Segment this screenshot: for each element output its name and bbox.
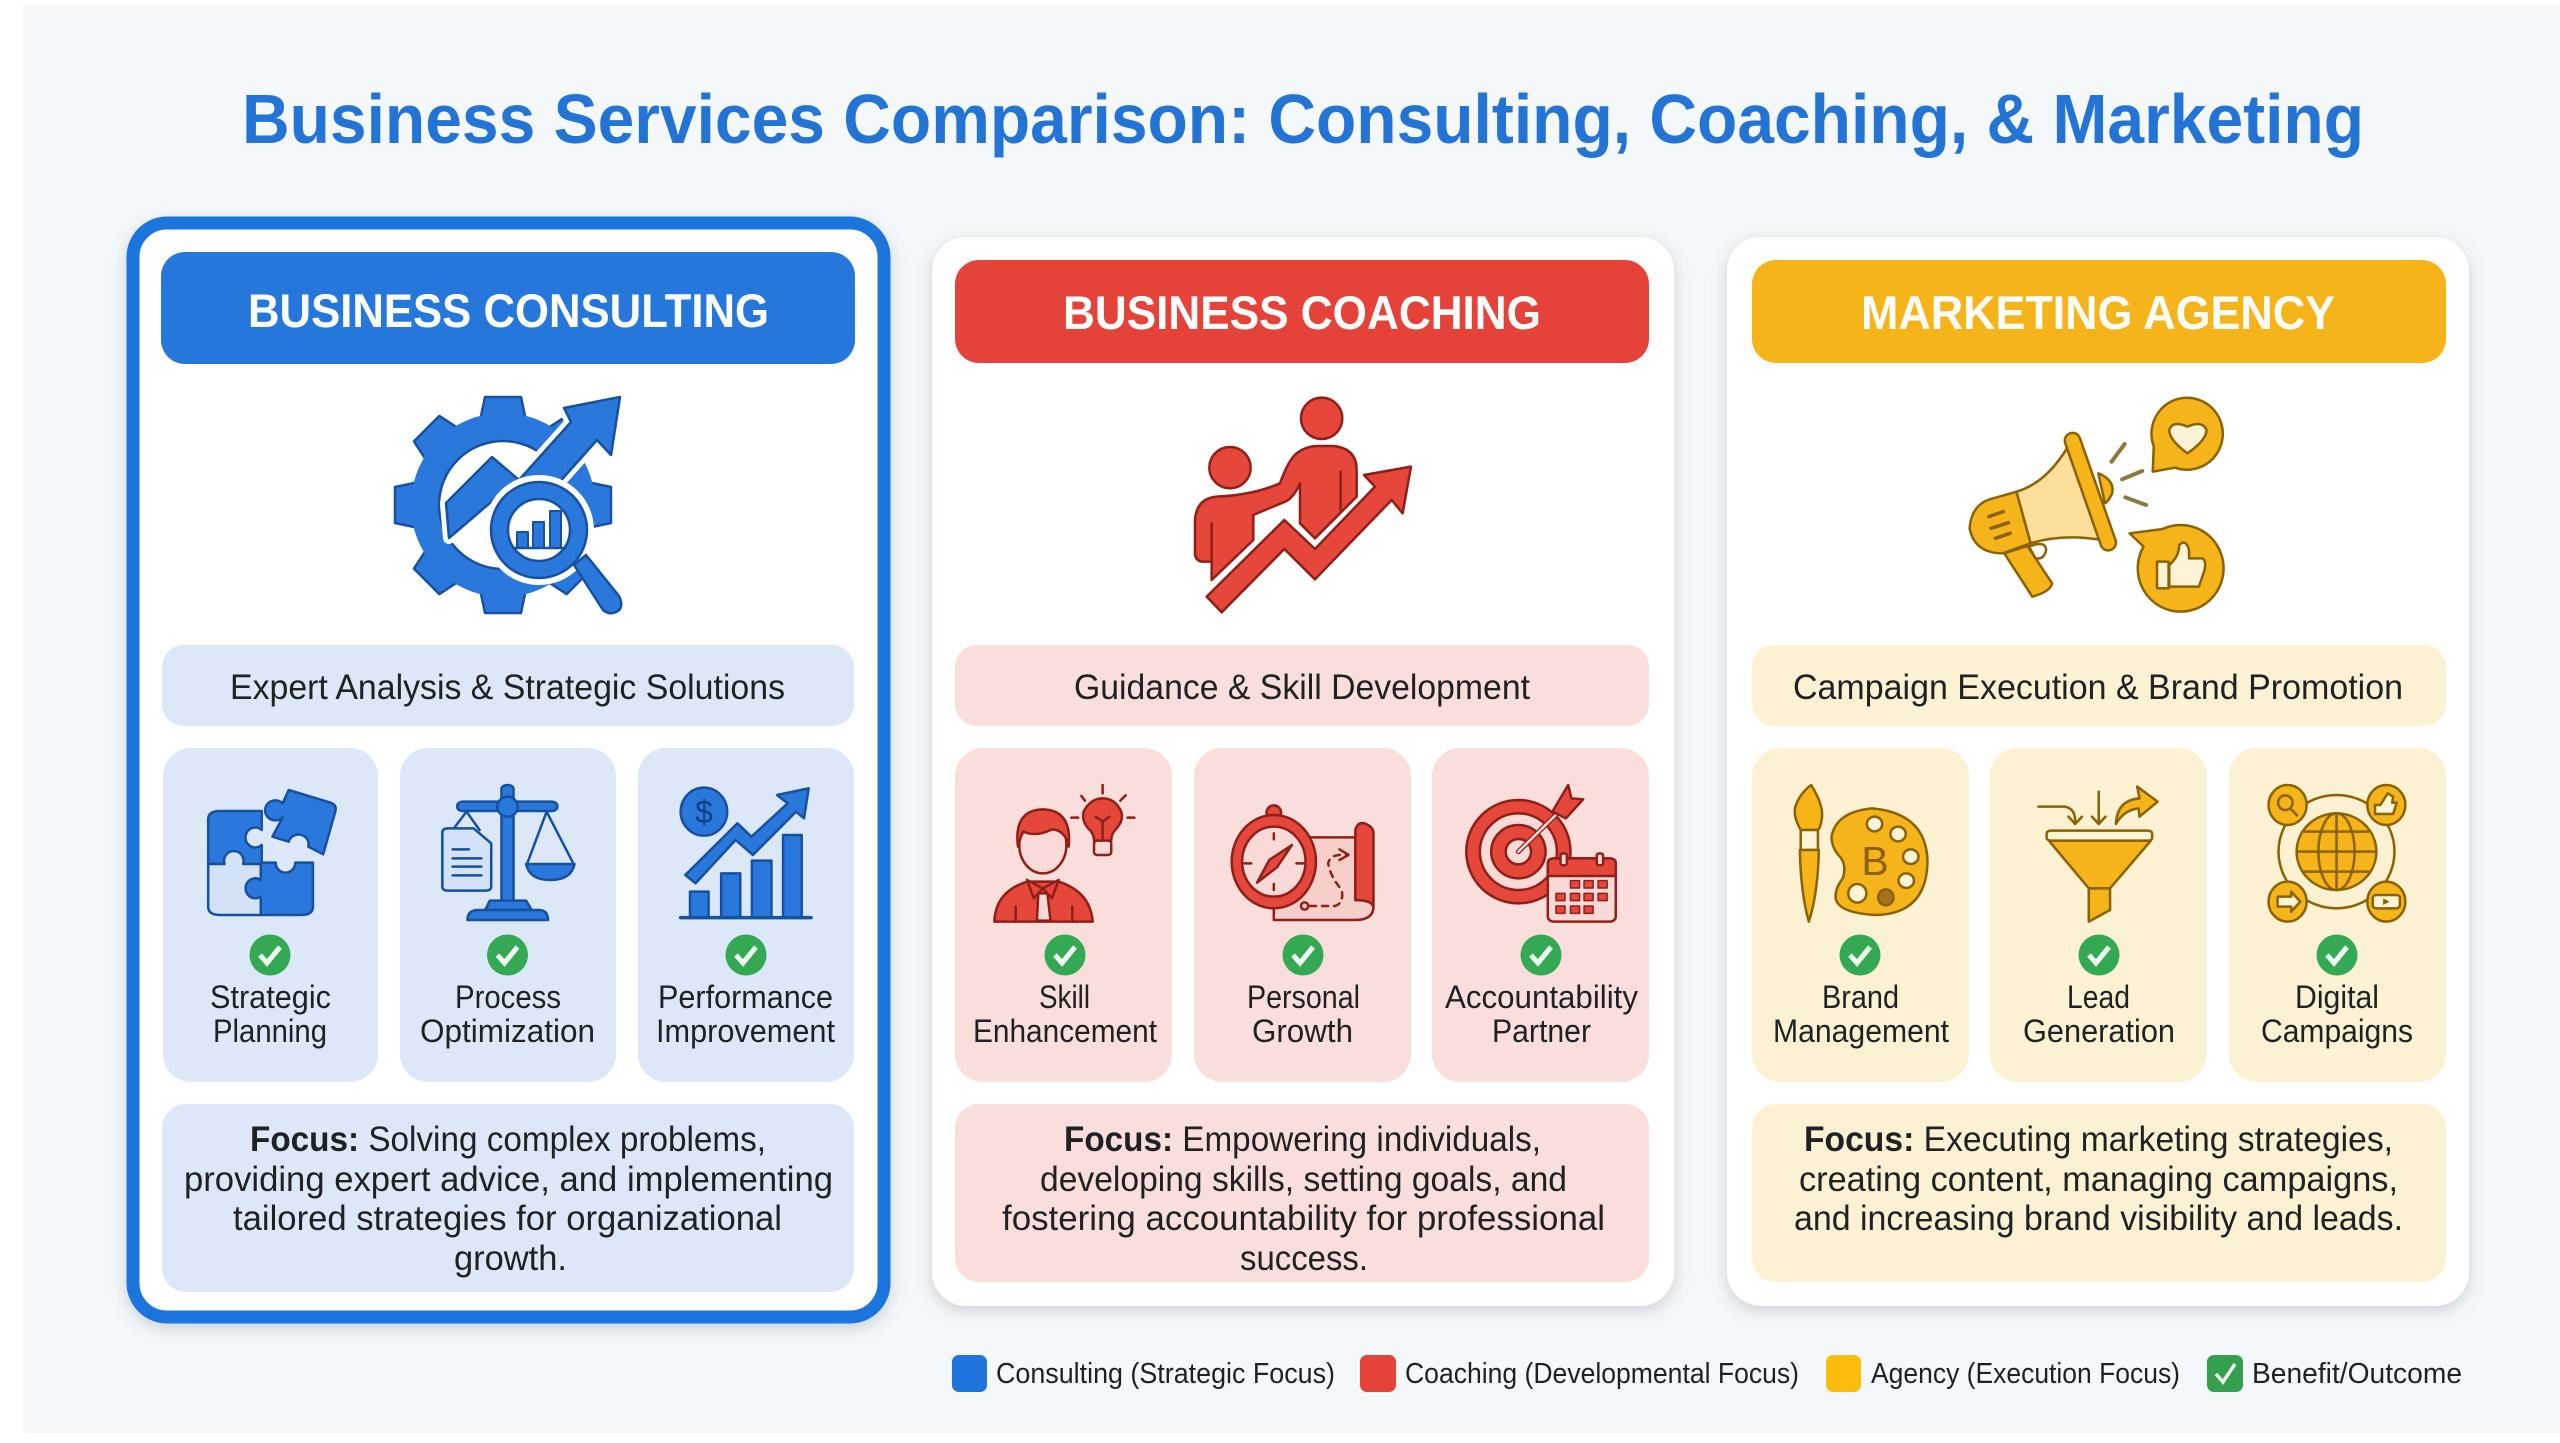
label: Enhancement <box>973 1013 1157 1049</box>
label <box>2023 979 2175 1049</box>
label <box>1445 979 1638 1049</box>
label: Process <box>455 979 561 1015</box>
icon: megaphone with reactions <box>1970 398 2224 612</box>
icon: check <box>1282 934 1324 976</box>
tile: lead generation <box>1990 748 2207 1082</box>
focus box: consulting: Focus: Solving complex problems, <box>250 1120 766 1159</box>
focus box: consulting <box>162 1104 854 1292</box>
label: Improvement <box>656 1013 835 1049</box>
legend item: coaching: Coaching (Developmental Focus) <box>1405 1358 1799 1390</box>
header: business coaching: BUSINESS COACHING <box>1063 286 1541 339</box>
label: Growth <box>1252 1013 1353 1049</box>
focus box: coaching <box>955 1104 1649 1282</box>
focus box: coaching: fostering accountability for professional <box>1002 1199 1605 1238</box>
icon: gear with arrow and magnifier <box>395 397 621 613</box>
legend item: agency: Agency (Execution Focus) <box>1871 1358 2180 1390</box>
focus box: coaching: developing skills, setting goals, and <box>1040 1160 1567 1199</box>
icon: check <box>2316 934 2358 976</box>
icon: check <box>1044 934 1086 976</box>
focus box: consulting: growth. <box>454 1239 567 1278</box>
label: Digital <box>2295 979 2379 1015</box>
icon: check <box>1520 934 1562 976</box>
label: Optimization <box>420 1013 595 1049</box>
header: marketing agency: MARKETING AGENCY <box>1861 286 2335 339</box>
subtitle: consulting: Expert Analysis & Strategic Solutions <box>230 668 785 707</box>
subtitle: coaching: Guidance & Skill Development <box>1074 668 1530 707</box>
tile: digital campaigns <box>2229 748 2446 1082</box>
subtitle: agency <box>1752 645 2446 726</box>
focus box: coaching: success. <box>1240 1239 1368 1278</box>
label: Generation <box>2023 1013 2175 1049</box>
focus box: consulting: tailored strategies for organizational <box>233 1199 782 1238</box>
icon: dollar sign: $ <box>695 794 713 830</box>
focus box: consulting: providing expert advice, and implementing <box>184 1160 833 1199</box>
icon: mentor and growth arrow <box>1195 398 1411 612</box>
tile: personal growth <box>1194 748 1411 1082</box>
tile: brand management <box>1752 748 1969 1082</box>
header: business coaching <box>955 260 1649 363</box>
subtitle: consulting <box>162 645 854 726</box>
icon: check <box>726 934 766 976</box>
label <box>1773 979 1949 1049</box>
icon: check <box>1840 934 1880 976</box>
icon: compass and map <box>1232 805 1373 920</box>
icon: puzzle <box>208 790 336 915</box>
label <box>210 979 331 1049</box>
tile: strategic planning <box>163 748 378 1082</box>
tile: skill enhancement <box>955 748 1172 1082</box>
focus box: agency: and increasing brand visibility and leads. <box>1794 1199 2403 1238</box>
label: Accountability <box>1445 979 1638 1015</box>
subtitle: coaching <box>955 645 1649 726</box>
focus box: agency: Focus: Executing marketing strategies, <box>1804 1120 2393 1159</box>
icon: person with bulb <box>994 785 1134 922</box>
focus box: agency: creating content, managing campaigns, <box>1799 1160 2398 1199</box>
label: Performance <box>658 979 833 1015</box>
legend <box>952 1355 2462 1392</box>
focus box: agency <box>1752 1104 2446 1282</box>
tile: process optimization <box>400 748 616 1082</box>
header: business consulting <box>161 252 855 364</box>
label: Lead <box>2067 979 2130 1015</box>
panel: marketing agency <box>1727 237 2469 1306</box>
label <box>2261 979 2413 1049</box>
label: Strategic <box>210 979 331 1015</box>
label: Management <box>1773 1013 1949 1049</box>
panel: business consulting <box>133 223 884 1317</box>
label: Brand <box>1822 979 1899 1015</box>
label: Personal <box>1247 979 1360 1015</box>
header: business consulting: BUSINESS CONSULTING <box>248 284 769 337</box>
header: marketing agency <box>1752 260 2446 363</box>
legend item: consulting: Consulting (Strategic Focus) <box>996 1358 1335 1390</box>
label: Partner <box>1492 1013 1591 1049</box>
icon: scales and document <box>442 785 575 920</box>
icon: globe network <box>2269 785 2405 922</box>
label: Planning <box>213 1013 327 1049</box>
focus box: coaching: Focus: Empowering individuals, <box>1064 1120 1541 1159</box>
icon: palette letter: B <box>1861 838 1889 884</box>
icon: check <box>487 934 528 976</box>
subtitle: agency: Campaign Execution & Brand Promotion <box>1793 668 2403 707</box>
legend item: benefit: Benefit/Outcome <box>2252 1358 2462 1390</box>
title: Business Services Comparison: Consulting, Coaching, & Marketing <box>242 80 2364 158</box>
panel: business coaching <box>932 237 1674 1306</box>
label <box>973 979 1157 1049</box>
icon: check <box>250 934 290 976</box>
icon: check <box>2078 934 2120 976</box>
label <box>1247 979 1360 1049</box>
icon: funnel <box>2038 787 2158 922</box>
icon: growth chart <box>681 788 811 918</box>
label <box>656 979 835 1049</box>
label <box>420 979 595 1049</box>
icon: brush and palette <box>1795 785 1928 922</box>
icon: target and calendar <box>1466 785 1616 922</box>
tile: performance improvement <box>638 748 854 1082</box>
tile: accountability partner <box>1432 748 1649 1082</box>
label: Skill <box>1039 979 1090 1015</box>
legend item: benefit <box>2207 1355 2462 1392</box>
label: Campaigns <box>2261 1013 2413 1049</box>
